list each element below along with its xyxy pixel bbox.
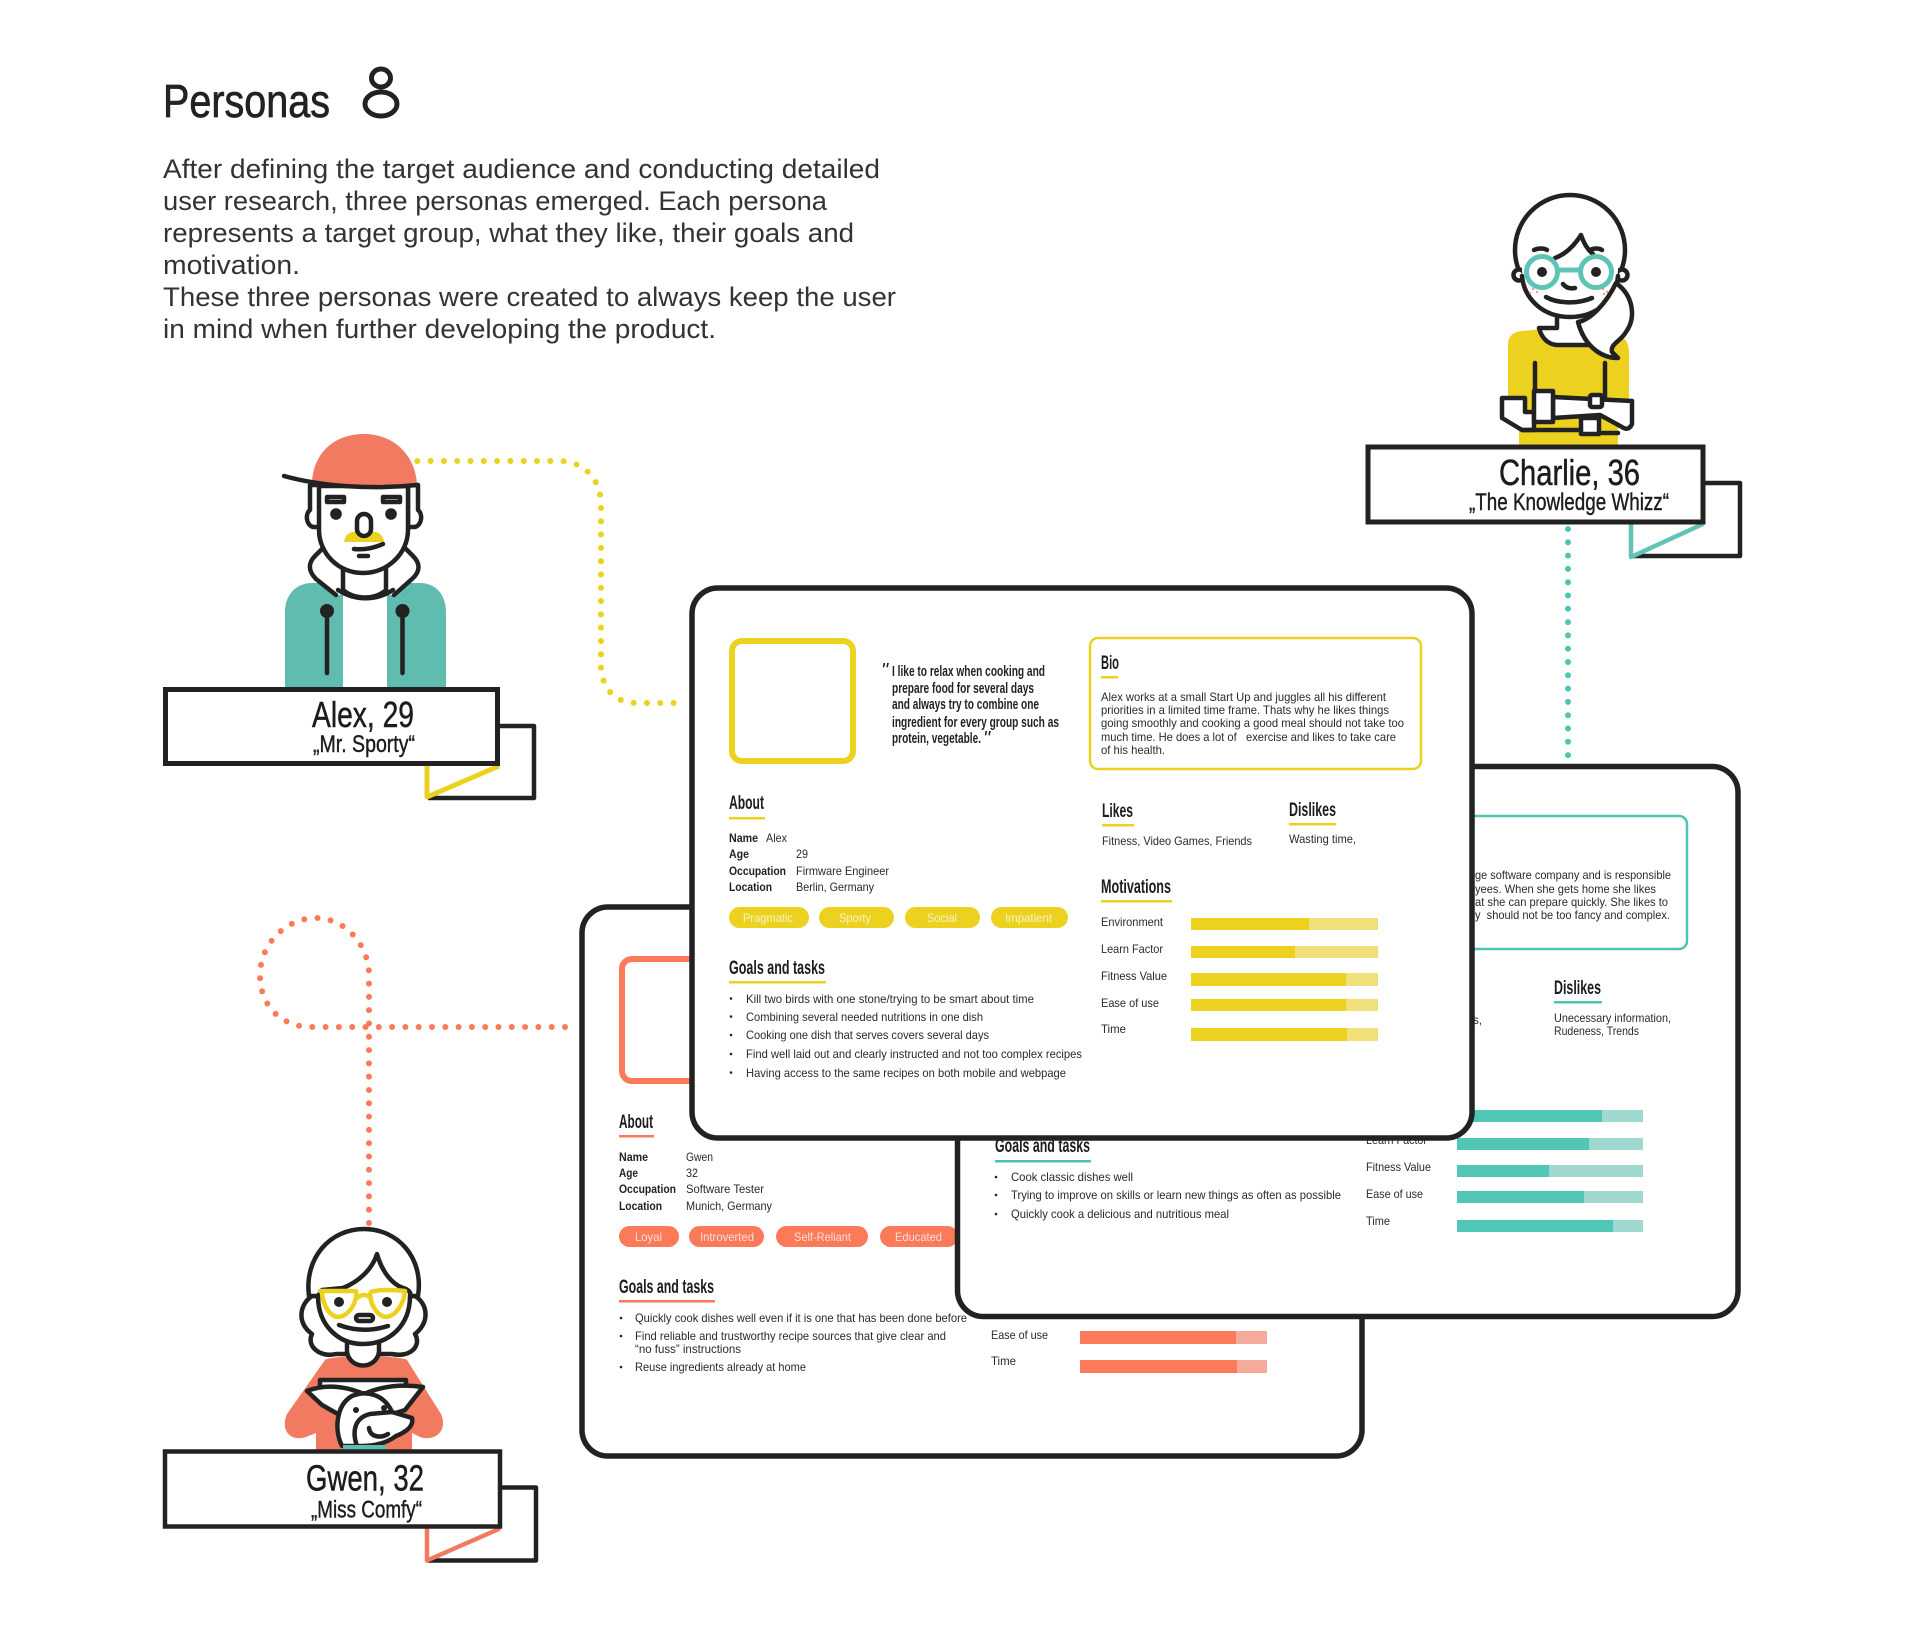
- Alex quote: ingredient for every group such as: [892, 714, 1059, 731]
- Alex name plate: „Mr. Sporty“: [313, 731, 415, 758]
- Charlie bio: yees. When she gets home she likes: [1475, 883, 1656, 896]
- Gwen about: Age: [619, 1167, 638, 1180]
- Charlie head: [1514, 195, 1628, 345]
- panel: Charlie card: [958, 766, 1738, 1316]
- Alex dislikes: [1289, 800, 1356, 846]
- Alex hoodie: [285, 556, 446, 687]
- Alex about: Age: [729, 848, 750, 861]
- Alex bio: of his health.: [1101, 744, 1165, 757]
- Charlie name plate: Charlie, 36: [1499, 452, 1640, 493]
- Charlie motivations: Fitness Value: [1366, 1161, 1431, 1174]
- Alex motivations: Time: [1101, 1023, 1126, 1036]
- Charlie crossed arms: [1502, 363, 1632, 434]
- Alex cap: [284, 434, 417, 487]
- Alex quote: I like to relax when cooking and: [892, 663, 1045, 680]
- Alex bio: going smoothly and cooking a good meal should not take too: [1101, 717, 1404, 730]
- Charlie goals and tasks: [995, 1136, 1341, 1221]
- Alex motivations: Motivations: [1101, 877, 1171, 898]
- Gwen sweater: [285, 1356, 443, 1454]
- Charlie motivations: [1366, 1110, 1643, 1232]
- Alex bio: [1090, 638, 1421, 769]
- Gwen goals and tasks: “no fuss” instructions: [635, 1343, 741, 1356]
- Alex motivations: [1101, 877, 1378, 1041]
- Gwen motivations: Time: [991, 1355, 1016, 1368]
- Gwen name plate: Gwen, 32: [306, 1458, 424, 1498]
- Alex motivations: Learn Factor: [1101, 943, 1163, 956]
- Gwen about: Name: [619, 1151, 649, 1164]
- Gwen goals and tasks: Find reliable and trustworthy recipe sources that give clear and: [635, 1330, 946, 1343]
- Gwen about: 32: [686, 1167, 698, 1180]
- Alex photo frame: [732, 641, 853, 761]
- Alex bio: much time. He does a lot of exercise and likes to take care: [1101, 731, 1396, 744]
- Alex dislikes: Dislikes: [1289, 800, 1336, 821]
- intro text: After defining the target audience and conducting detailed: [163, 154, 880, 184]
- Gwen trait tags: Educated: [895, 1231, 942, 1244]
- Alex about: Berlin, Germany: [796, 881, 874, 894]
- Alex motivations: Environment: [1101, 916, 1164, 929]
- Alex about: About: [729, 793, 764, 814]
- Charlie face: [1529, 267, 1608, 302]
- persona: Gwen: [165, 1229, 536, 1560]
- connector: Charlie to teal card: [1565, 529, 1571, 760]
- Alex about: Name: [729, 832, 759, 845]
- intro text: These three personas were created to always keep the user: [163, 282, 896, 312]
- Alex likes: Fitness, Video Games, Friends: [1102, 835, 1252, 848]
- Alex goals and tasks: Goals and tasks: [729, 958, 825, 979]
- Charlie back tag: [1630, 483, 1740, 556]
- Alex about: 29: [796, 848, 808, 861]
- Gwen dog: [337, 1393, 412, 1446]
- Charlie dislikes: [1554, 978, 1671, 1038]
- Gwen goals and tasks: Quickly cook dishes well even if it is one that has been done before: [635, 1312, 967, 1325]
- Alex quote: ": [881, 660, 889, 682]
- Alex drawstrings: [320, 604, 410, 673]
- Gwen motivations: [991, 1329, 1267, 1373]
- connector: Gwen to red card: [260, 918, 565, 1227]
- Charlie bio: ge software company and is responsible: [1475, 869, 1671, 882]
- Alex about: [729, 793, 889, 894]
- Gwen about: About: [619, 1112, 653, 1133]
- Gwen trait tags: [619, 1226, 958, 1247]
- Charlie name plate: „The Knowledge Whizz“: [1469, 489, 1669, 516]
- panel: Alex card: [692, 588, 1472, 1138]
- Gwen trait tags: Self-Reliant: [794, 1231, 852, 1244]
- Alex goals and tasks: Kill two birds with one stone/trying to be smart about time: [746, 993, 1034, 1006]
- intro text: motivation.: [163, 250, 300, 280]
- Charlie dislikes: Rudeness, Trends: [1554, 1025, 1639, 1038]
- Gwen goals and tasks: Reuse ingredients already at home: [635, 1361, 806, 1374]
- Alex quote: [881, 660, 1059, 750]
- Alex trait tags: [729, 907, 1068, 928]
- Alex goals and tasks: Cooking one dish that serves covers several days: [746, 1029, 989, 1042]
- Charlie name plate: [1368, 447, 1703, 522]
- Alex trait tags: Impatient: [1005, 912, 1053, 925]
- Alex about: Location: [729, 881, 772, 894]
- Alex about: Alex: [766, 832, 787, 845]
- Alex dislikes: Wasting time,: [1289, 833, 1356, 846]
- Gwen about: Munich, Germany: [686, 1200, 772, 1213]
- Alex name plate: [166, 690, 498, 764]
- Alex about: Firmware Engineer: [796, 865, 889, 878]
- intro text: in mind when further developing the product.: [163, 314, 716, 344]
- connector: Alex to yellow card: [411, 461, 678, 703]
- Alex likes: Likes: [1102, 801, 1133, 822]
- Charlie goals and tasks: Quickly cook a delicious and nutritious meal: [1011, 1208, 1229, 1221]
- icon: person: [365, 69, 397, 116]
- Gwen about: Occupation: [619, 1183, 676, 1196]
- Gwen about: Location: [619, 1200, 662, 1213]
- panel: Gwen card: [582, 907, 1362, 1456]
- Gwen about: Software Tester: [686, 1183, 764, 1196]
- Charlie motivations: Learn Factor: [1366, 1134, 1427, 1147]
- intro text: user research, three personas emerged. Each persona: [163, 186, 828, 216]
- Alex motivations: Ease of use: [1101, 997, 1159, 1010]
- Gwen back tag: [425, 1488, 536, 1560]
- Gwen collar: [343, 1445, 386, 1452]
- Alex motivations: Fitness Value: [1101, 970, 1167, 983]
- Alex quote: and always try to combine one: [892, 696, 1039, 713]
- Gwen name plate: „Miss Comfy“: [311, 1496, 422, 1524]
- Alex goals and tasks: [729, 958, 1082, 1080]
- Alex goals and tasks: Combining several needed nutritions in one dish: [746, 1011, 983, 1024]
- Gwen goals and tasks: [619, 1277, 967, 1374]
- persona: Alex: [166, 434, 534, 798]
- Alex about: Occupation: [729, 865, 786, 878]
- Gwen photo frame: [622, 959, 782, 1081]
- Gwen trait tags: Loyal: [635, 1231, 662, 1244]
- Alex name plate: Alex, 29: [312, 694, 414, 735]
- Charlie bio: y should not be too fancy and complex.: [1475, 909, 1670, 922]
- persona: Charlie: [1368, 195, 1740, 557]
- Gwen fold: [427, 1528, 500, 1560]
- Charlie motivations: Time: [1366, 1215, 1390, 1228]
- Charlie ponytail: [1578, 283, 1632, 358]
- Gwen goals and tasks: Goals and tasks: [619, 1277, 714, 1298]
- Alex goals and tasks: Having access to the same recipes on both mobile and webpage: [746, 1067, 1066, 1080]
- Charlie likes: Trends,: [1443, 1014, 1482, 1027]
- Alex trait tags: Sporty: [839, 912, 871, 925]
- title: Personas: [163, 75, 330, 127]
- Alex quote: protein, vegetable.: [892, 730, 981, 747]
- Alex trait tags: Social: [927, 912, 957, 925]
- Charlie fold: [1631, 524, 1703, 557]
- Gwen motivations: Ease of use: [991, 1329, 1048, 1342]
- intro text: [163, 154, 896, 344]
- Alex bio: Bio: [1101, 653, 1119, 674]
- Charlie bio: at she can prepare quickly. She likes to: [1475, 896, 1668, 909]
- Charlie goals and tasks: Cook classic dishes well: [1011, 1171, 1133, 1184]
- Alex bio: Alex works at a small Start Up and juggles all his different: [1101, 691, 1387, 704]
- Charlie glasses: [1526, 256, 1612, 288]
- Alex bio: priorities in a limited time frame. Thats why he likes things: [1101, 704, 1389, 717]
- Gwen about: [619, 1112, 772, 1213]
- intro text: represents a target group, what they like, their goals and: [163, 218, 854, 248]
- Gwen hair and face: [301, 1229, 426, 1366]
- Alex goals and tasks: Find well laid out and clearly instructed and not too complex recipes: [746, 1048, 1082, 1061]
- Gwen glasses: [320, 1290, 405, 1317]
- Alex back tag: [426, 726, 534, 798]
- Alex fold: [427, 766, 499, 797]
- Charlie dislikes: Unecessary information,: [1554, 1012, 1671, 1025]
- Gwen name plate: [165, 1452, 500, 1526]
- Alex quote: prepare food for several days: [892, 680, 1034, 697]
- Gwen book: [307, 1380, 423, 1418]
- Charlie bio: [1400, 816, 1687, 949]
- Alex likes: [1102, 801, 1252, 848]
- Charlie sweater: [1508, 329, 1629, 445]
- Alex trait tags: Pragmatic: [743, 912, 793, 925]
- Charlie goals and tasks: Goals and tasks: [995, 1136, 1090, 1157]
- Charlie motivations: Ease of use: [1366, 1188, 1423, 1201]
- Charlie dislikes: Dislikes: [1554, 978, 1601, 999]
- Alex head: [307, 485, 421, 598]
- Charlie goals and tasks: Trying to improve on skills or learn new things as often as possible: [1011, 1189, 1341, 1202]
- Gwen trait tags: Introverted: [700, 1231, 754, 1244]
- Gwen about: Gwen: [686, 1151, 713, 1164]
- Alex quote: ": [983, 728, 991, 750]
